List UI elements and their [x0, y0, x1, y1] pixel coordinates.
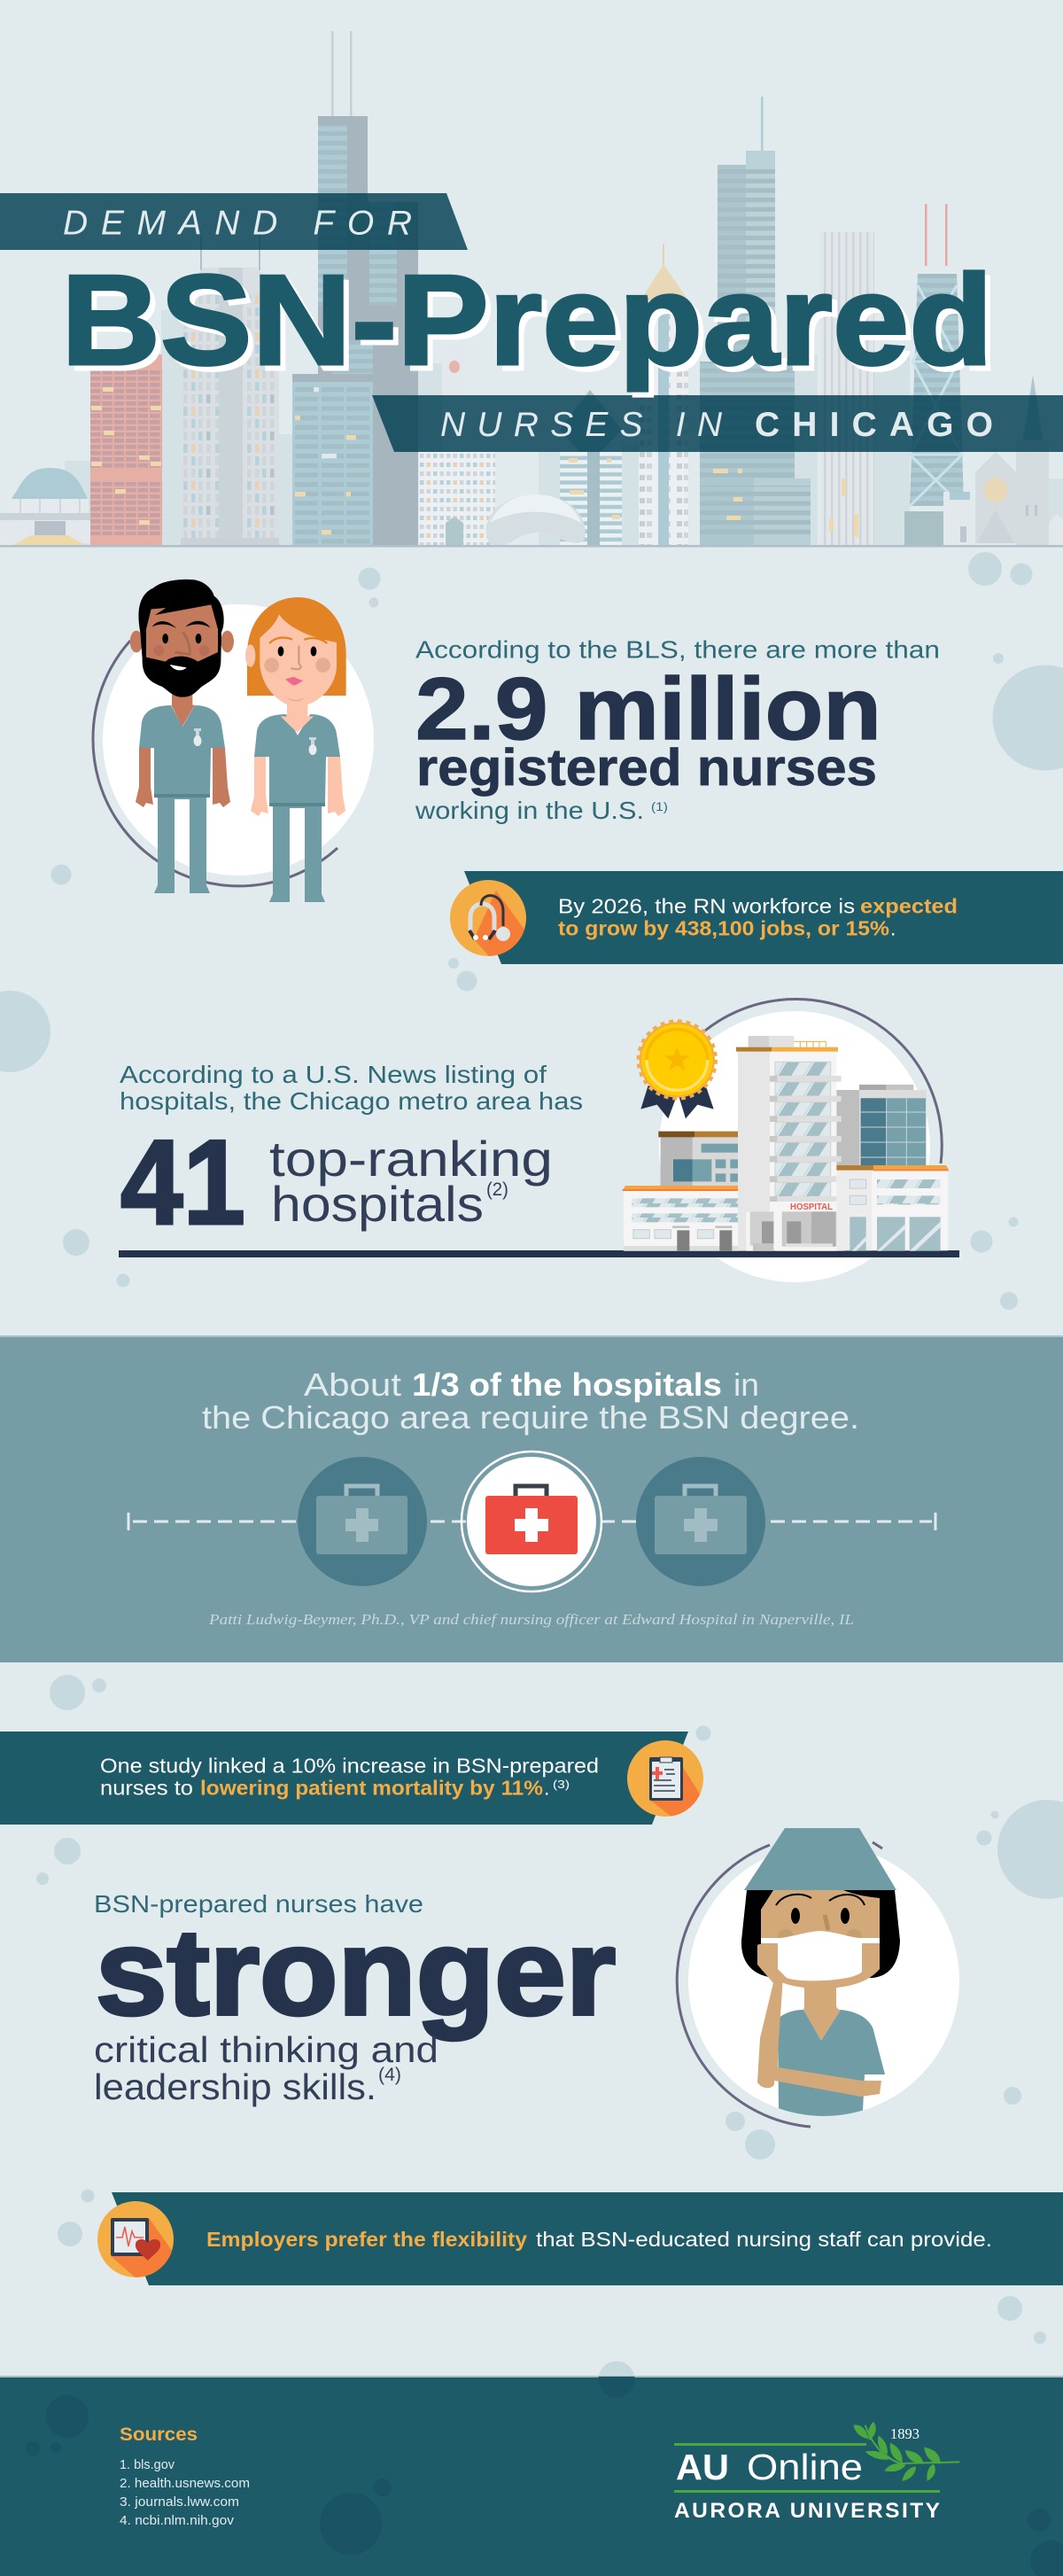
faint background buildings [65, 310, 1063, 545]
stat: stronger critical thinking: (4) [378, 2065, 401, 2085]
title ribbon: demand for [0, 193, 468, 250]
backdrop circle [659, 1011, 930, 1282]
banner: employers prefer flexibility: that BSN-educated nursing staff can provide. [536, 2228, 992, 2251]
stat: 2.9 million registered nurses [415, 636, 940, 824]
stat: 41 top-ranking hospitals: hospitals, the Chicago metro area has [120, 1087, 583, 1115]
male nurse [130, 580, 234, 893]
banner: RN workforce growth [450, 871, 1063, 966]
footer bubbles [26, 2377, 1038, 2572]
Aurora University logo [674, 2422, 959, 2523]
Aurora University logo: 1893 [890, 2425, 919, 2442]
striped spire building [560, 390, 622, 545]
skyline ground line [0, 545, 1063, 548]
sources list: 3. journals.lww.com [120, 2494, 239, 2510]
stat: 2.9 million registered nurses: working in the U.S. [415, 797, 644, 824]
banner: employers prefer flexibility [97, 2192, 1063, 2291]
title ribbon: nurses in Chicago [372, 395, 1063, 452]
stat: 41 top-ranking hospitals: According to a U.S. News listing of [120, 1061, 547, 1088]
title ribbon: nurses in Chicago: NURSES IN [440, 406, 723, 444]
heading text: the Chicago area require the BSN degree. [202, 1399, 859, 1436]
main title: BSN-Prepared: BSN-Prepared [61, 248, 993, 392]
icon: highlighted first-aid kit [462, 1451, 601, 1592]
stat: 41 top-ranking hospitals: hospitals [271, 1176, 484, 1232]
stat: stronger critical thinking [94, 1890, 616, 2107]
sources list [120, 2424, 250, 2528]
gray twin antenna building [181, 235, 279, 545]
clock tower and low building [419, 344, 495, 545]
heading text: About [304, 1366, 401, 1403]
hospital buildings [623, 1036, 949, 1251]
stat: 2.9 million registered nurses: 2.9 million [415, 659, 881, 758]
heading text [202, 1366, 859, 1436]
icon: muted first-aid kit right [636, 1457, 765, 1586]
banner: RN workforce growth: . [890, 917, 896, 940]
illustration: hospital with award ribbon [119, 999, 959, 1282]
heading text: 1/3 of the hospitals [412, 1366, 722, 1403]
arm and hand [757, 1944, 881, 2097]
icon: stethoscope [450, 880, 526, 956]
sources list: 1. bls.gov [120, 2457, 175, 2472]
stat: stronger critical thinking: critical thinking and [94, 2029, 438, 2070]
icon: clipboard [627, 1740, 703, 1817]
sources list: Sources [120, 2424, 198, 2445]
icon: olive branch [853, 2422, 959, 2481]
icon: heart monitor [97, 2201, 174, 2277]
banner: patient mortality study: lowering patient mortality by 11% [200, 1777, 543, 1800]
surgical cap [744, 1828, 896, 1890]
decorative bubbles: light [0, 552, 1063, 2398]
attribution quote: Patti Ludwig-Beymer, Ph.D., VP and chief nursing officer at Edward Hospital in Naperville, IL [208, 1611, 854, 1628]
female nurse [245, 597, 346, 902]
neck and scrubs [778, 1981, 885, 2117]
title ribbon: nurses in Chicago: CHICAGO [755, 406, 993, 444]
hair [741, 1890, 900, 1978]
dome pavilion [0, 468, 123, 545]
main title: BSN-Prepared: BSN-Prepared [66, 253, 998, 397]
stat: stronger critical thinking: stronger [96, 1904, 616, 2041]
sources list: 4. ncbi.nlm.nih.gov [120, 2513, 235, 2528]
banner: RN workforce growth: to grow by 438,100 jobs, or 15% [558, 917, 889, 940]
stat: 41 top-ranking hospitals: (2) [486, 1179, 508, 1200]
backdrop circle [103, 604, 374, 876]
banner: patient mortality study [0, 1732, 709, 1825]
illustration: two nurses [93, 580, 374, 902]
footer [0, 2361, 1063, 2576]
tall blue tower [700, 97, 811, 545]
pink building [90, 354, 162, 545]
banner: employers prefer flexibility: Employers prefer the flexibility [206, 2228, 527, 2251]
stat: stronger critical thinking: leadership skills. [94, 2066, 376, 2107]
crown building [639, 244, 688, 545]
Aurora University logo: AURORA UNIVERSITY [674, 2499, 940, 2523]
tall black tower with twin antennas [292, 31, 418, 545]
header skyline illustration [0, 31, 1063, 548]
banner: RN workforce growth: By 2026, the RN workforce is [558, 895, 855, 918]
Hancock tower with antennas and cross bracing [904, 204, 964, 545]
dashed timeline [128, 1513, 935, 1530]
panel: BSN requirement [0, 1335, 1063, 1662]
hospital sign: HOSPITAL [790, 1202, 833, 1212]
stat: 41 top-ranking hospitals [120, 1061, 583, 1249]
sources list: 2. health.usnews.com [120, 2476, 250, 2491]
banner: patient mortality study: nurses to [100, 1777, 193, 1800]
banner: patient mortality study: . [544, 1777, 549, 1800]
ground bar [119, 1250, 959, 1257]
stat: 2.9 million registered nurses: According to the BLS, there are more than [415, 636, 940, 664]
church [943, 375, 1063, 545]
face and mask [761, 1890, 880, 1988]
banner: patient mortality study: (3) [553, 1778, 570, 1791]
title ribbon: demand for: DEMAND FOR [63, 204, 412, 243]
illustration: thinking nurse in surgical mask [677, 1828, 959, 2127]
vertically striped tower [820, 232, 874, 545]
Aurora University logo: Online [747, 2447, 863, 2487]
bean sculpture [486, 494, 586, 546]
heading text: in [733, 1366, 759, 1403]
stat: 41 top-ranking hospitals: 41 [120, 1115, 245, 1249]
stat: stronger critical thinking: BSN-prepared nurses have [94, 1890, 423, 1918]
icon: award medal [639, 1022, 716, 1118]
Aurora University logo: AU [676, 2447, 729, 2487]
icon: muted first-aid kit left [298, 1457, 427, 1586]
stat: 2.9 million registered nurses: registered nurses [416, 739, 877, 797]
banner: RN workforce growth: expected [860, 895, 958, 918]
banner: patient mortality study: One study linked a 10% increase in BSN-prepared [100, 1755, 599, 1778]
stat: 2.9 million registered nurses: (1) [651, 799, 668, 813]
stat: 41 top-ranking hospitals: top-ranking [269, 1131, 553, 1187]
